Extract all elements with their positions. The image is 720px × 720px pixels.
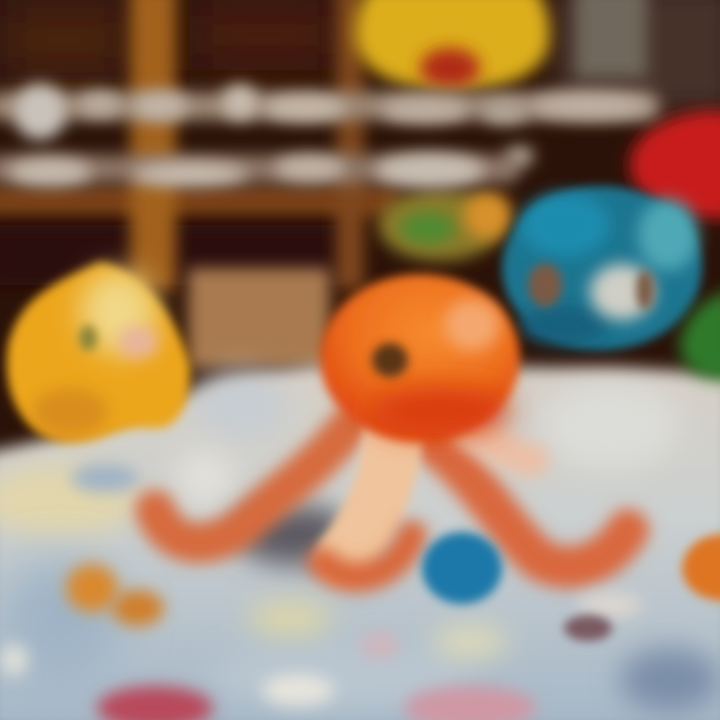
beige box <box>188 268 330 368</box>
small mixed toy at lower right <box>564 592 642 641</box>
tentacle: right upper <box>470 432 532 460</box>
octopus eye <box>372 343 408 377</box>
small blue ball <box>422 532 502 604</box>
yellow plush toy <box>7 262 190 442</box>
blurred shelf sign lettering <box>0 84 660 187</box>
tentacle: centre front <box>345 440 392 555</box>
octopus head <box>320 274 520 442</box>
blanket spots along bottom edge <box>97 686 536 720</box>
small orange toy on the floor <box>66 564 164 626</box>
blue ball <box>502 186 702 350</box>
red ball <box>630 111 720 219</box>
yellow toy at top of shelf <box>355 0 550 90</box>
floor: patterned blanket <box>0 362 720 720</box>
orange toy at right edge <box>682 534 720 601</box>
head underside <box>370 386 510 434</box>
head highlight <box>444 299 500 351</box>
green toy behind blue ball <box>378 189 512 261</box>
grey object on shelf <box>575 0 647 78</box>
green object at right edge <box>680 290 720 380</box>
octopus shadow <box>235 505 355 565</box>
tentacle: centre tip <box>322 535 412 577</box>
background: dark wooden shelf <box>0 0 720 410</box>
tentacle: right <box>435 445 628 567</box>
tentacle: far left <box>155 425 350 543</box>
octopus toy <box>155 274 628 577</box>
